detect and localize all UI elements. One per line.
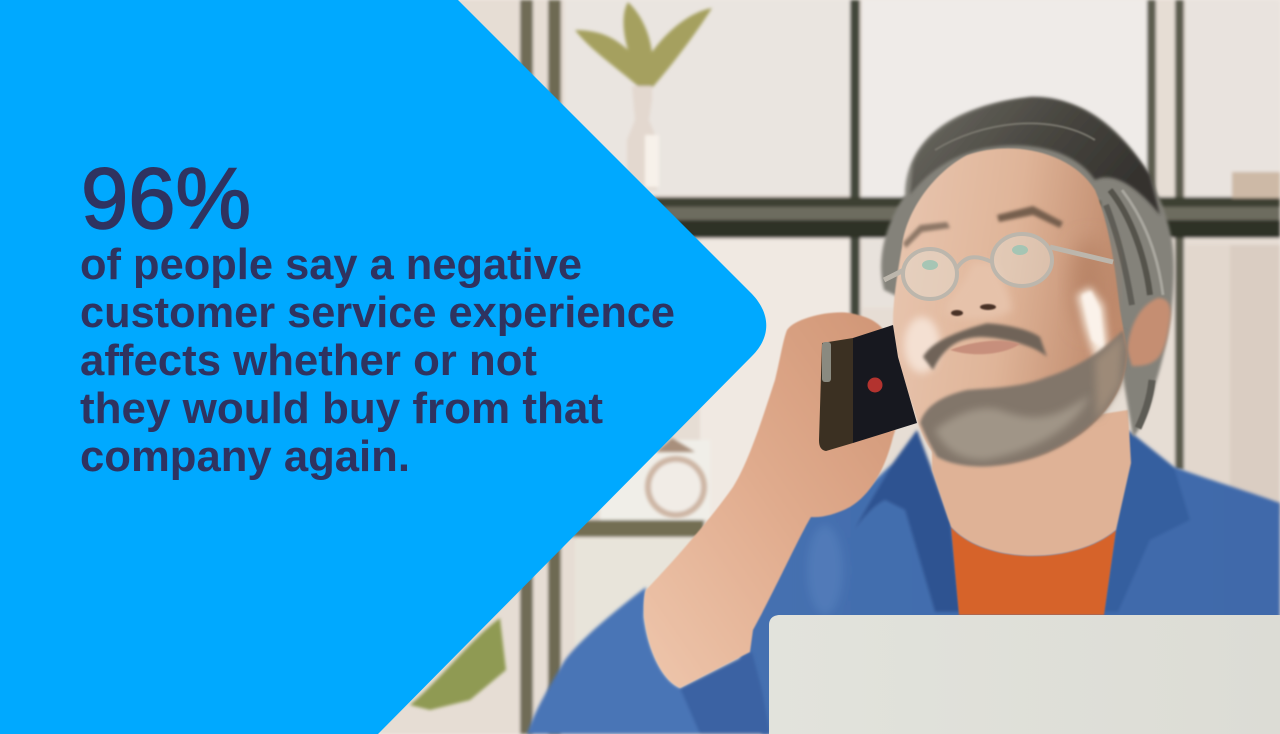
- shirt: [735, 430, 1280, 734]
- face: [893, 148, 1127, 466]
- statement text: [80, 240, 675, 481]
- statement text: customer service experience: [80, 288, 675, 337]
- eyebrows: [903, 206, 1063, 248]
- hair strands: [935, 123, 1163, 428]
- cheek shadow and highlights: [904, 240, 1110, 373]
- beard and moustache: [920, 323, 1127, 466]
- blue arrow panel: [0, 0, 766, 734]
- statement text: of people say a negative: [80, 240, 582, 289]
- statement text: company again.: [80, 432, 410, 481]
- ear: [1127, 298, 1170, 366]
- top hair: [910, 97, 1160, 215]
- statement text: affects whether or not: [80, 336, 537, 385]
- statistic text block: [80, 151, 675, 481]
- nose: [945, 262, 1012, 319]
- rolled sleeve: [527, 587, 770, 734]
- photo: man on the phone at a desk: [380, 0, 1280, 734]
- glasses: [884, 234, 1113, 299]
- headline number: 96%: [81, 151, 251, 247]
- statement text: they would buy from that: [80, 384, 603, 433]
- hair behind the head: [881, 99, 1174, 437]
- room background and shelving: [380, 0, 1280, 734]
- forearm and hand: [644, 312, 905, 688]
- laptop: [769, 615, 1280, 734]
- orange t-shirt: [951, 527, 1116, 615]
- plant and vase: [410, 2, 712, 710]
- neck: [932, 410, 1131, 556]
- alarm clock: [645, 438, 707, 518]
- phone: [819, 325, 917, 451]
